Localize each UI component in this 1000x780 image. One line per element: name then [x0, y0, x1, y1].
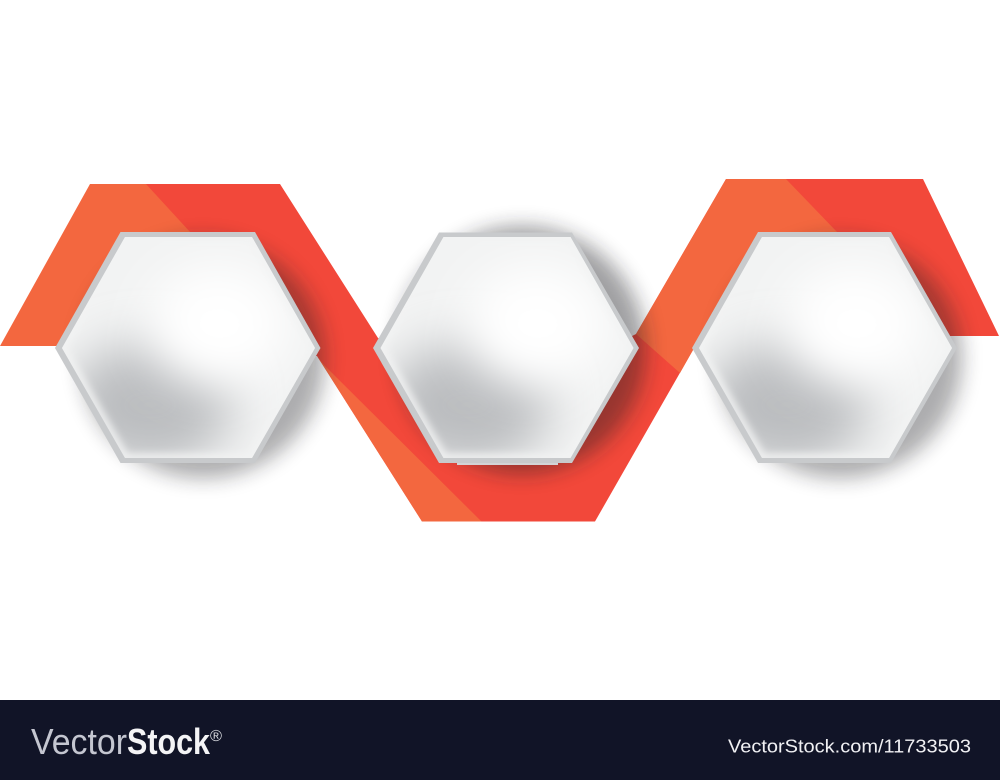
logo: VectorStock: ®	[210, 728, 222, 745]
ribbon orange fold: centre	[317, 356, 482, 522]
hexagon 1	[55, 232, 321, 467]
shadow: right hexagon	[718, 238, 962, 478]
hexagon 3	[692, 232, 958, 467]
ribbon orange fold: left	[0, 184, 191, 346]
hexagon 2 bottom tab	[457, 462, 558, 465]
infographic canvas	[0, 179, 1000, 780]
hexagon 3 border	[692, 232, 957, 463]
hexagon 2	[373, 232, 639, 467]
logo: VectorStock: Stock	[127, 721, 211, 762]
hexagon 3 face	[699, 237, 952, 458]
ribbon red base	[90, 179, 999, 522]
shadow: centre hexagon	[398, 226, 646, 474]
footer banner	[0, 700, 1000, 780]
hexagon 2 border	[373, 232, 639, 463]
zigzag ribbon	[0, 179, 999, 522]
image id url: VectorStock.com/11733503	[728, 736, 971, 756]
shadow: left hexagon	[81, 238, 325, 478]
hexagon 1 border	[55, 232, 320, 463]
logo: VectorStock: Vector	[31, 721, 127, 762]
hexagon 1 face	[62, 237, 315, 458]
hexagon 2 face	[380, 237, 634, 458]
ribbon orange fold: right	[636, 179, 838, 373]
hexagon shadows	[81, 226, 962, 478]
logo: VectorStock	[31, 721, 222, 762]
